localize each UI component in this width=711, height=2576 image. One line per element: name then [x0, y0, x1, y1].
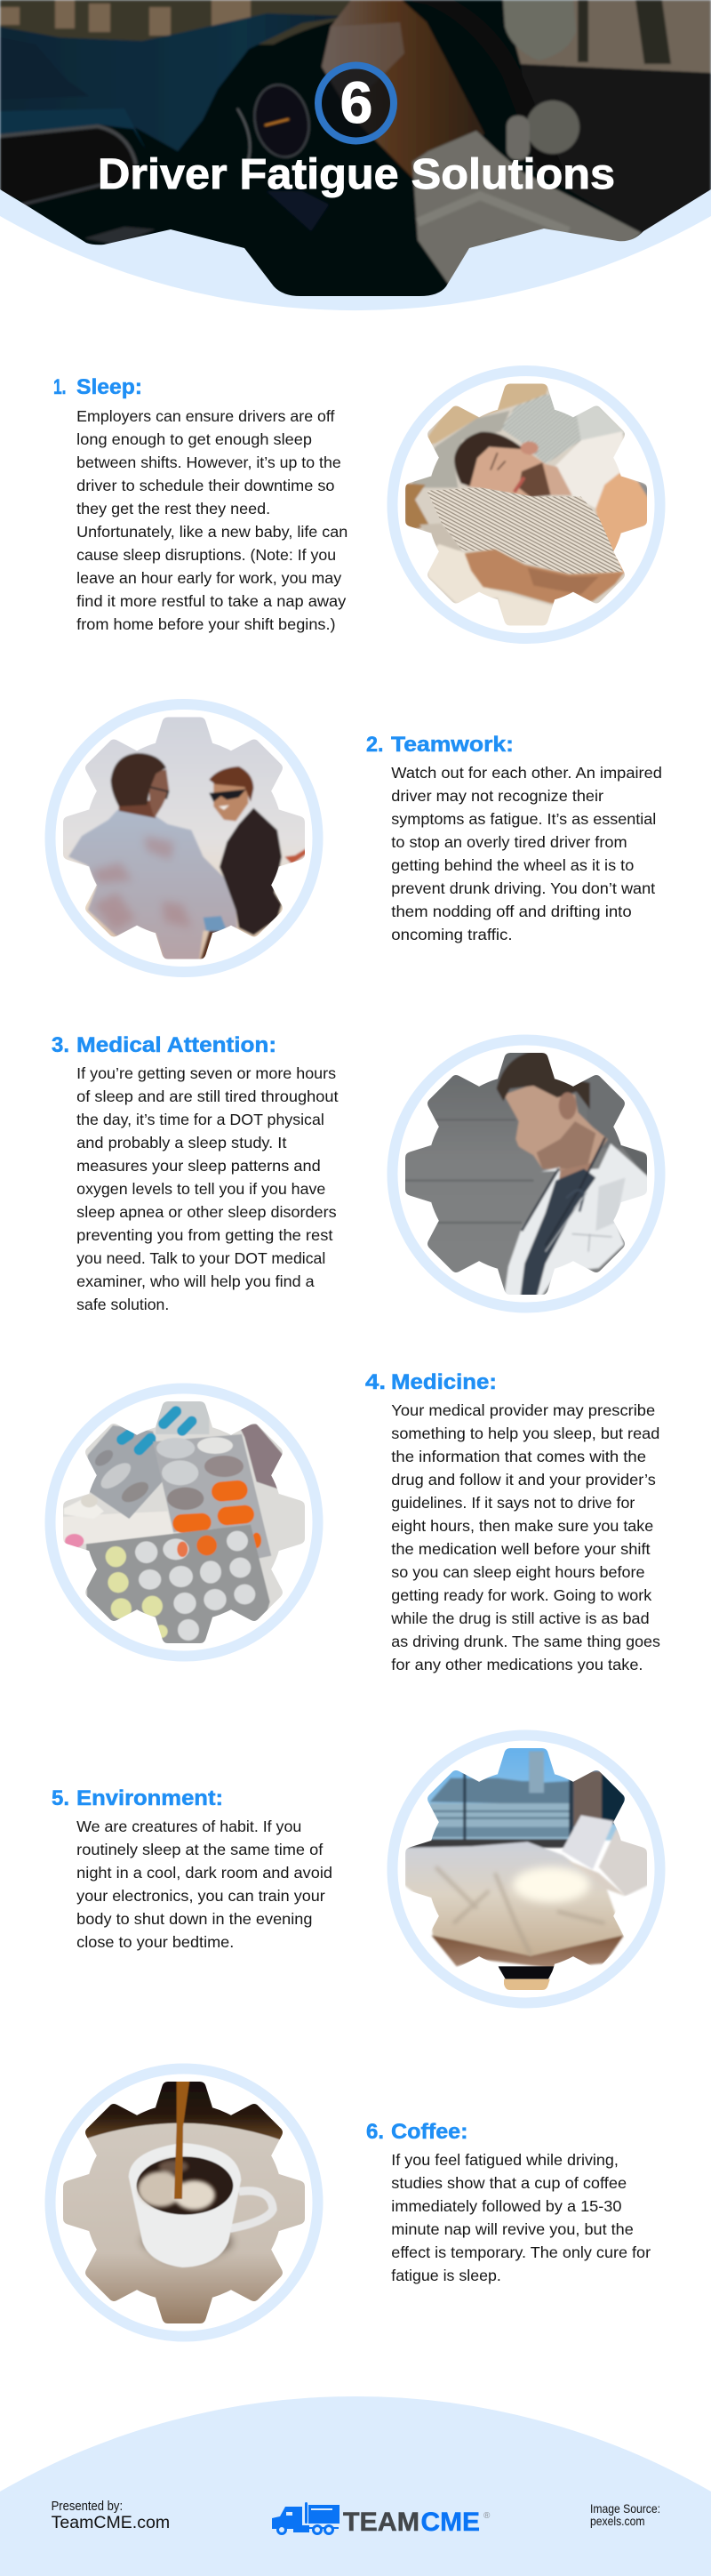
- image: two men talking: [50, 704, 318, 972]
- footer logo: TeamCME truck: TEAM: [343, 2508, 419, 2537]
- body text: medical attention: measures your sleep patterns and: [76, 1157, 321, 1175]
- body text: medicine: the information that comes with the: [391, 1448, 646, 1465]
- body text: teamwork: getting behind the wheel as it is to: [391, 856, 634, 874]
- body text: environment: routinely sleep at the same time of: [76, 1841, 323, 1858]
- body text: medical attention: If you’re getting seven or more hours: [76, 1064, 336, 1082]
- body text: medicine: guidelines. If it says not to drive for: [391, 1494, 635, 1512]
- body text: teamwork: them nodding off and drifting into: [391, 903, 632, 920]
- gauge: [252, 82, 311, 160]
- footer logo: TeamCME truck: ®: [483, 2511, 491, 2521]
- body text: coffee: effect is temporary. The only cure for: [391, 2243, 651, 2261]
- panel: 4. Medicine text: [365, 1370, 660, 1673]
- body text: teamwork: oncoming traffic.: [391, 926, 512, 943]
- panel: 1. Sleep text: [53, 375, 348, 633]
- body text: sleep: from home before your shift begins.): [76, 615, 336, 633]
- heading: 1. Sleep: 1.: [53, 375, 66, 399]
- body text: environment: body to shut down in the evening: [76, 1910, 312, 1928]
- body text: teamwork: prevent drunk driving. You don’t want: [391, 879, 655, 897]
- header number badge: 6: [340, 69, 372, 135]
- body text: medical attention: you need. Talk to your DOT medical: [76, 1249, 325, 1267]
- body text: sleep: cause sleep disruptions. (Note: If you: [76, 546, 336, 564]
- panel: 2. Teamwork text: [366, 733, 662, 943]
- footer: image source: [590, 2501, 660, 2528]
- body text: medicine: for any other medications you take.: [391, 1656, 643, 1673]
- body text: coffee: [391, 2151, 651, 2284]
- heading: 3. Medical Attention: 3.: [52, 1033, 69, 1057]
- body text: medical attention: the day, it’s time for a DOT physical: [76, 1111, 324, 1128]
- soft duvet folds: [435, 1867, 604, 1954]
- body text: sleep: they get the rest they need.: [76, 500, 270, 518]
- body text: coffee: If you feel fatigued while driving,: [391, 2151, 619, 2169]
- body text: medicine: getting ready for work. Going to work: [391, 1586, 651, 1604]
- body text: sleep: leave an hour early for work, you may: [76, 569, 341, 587]
- header number badge: [318, 66, 394, 140]
- heading: 2. Teamwork: Teamwork:: [391, 733, 514, 757]
- heading: 4. Medicine: Medicine:: [391, 1370, 497, 1394]
- body text: coffee: studies show that a cup of coffee: [391, 2174, 627, 2192]
- heading: 5. Environment: Environment:: [76, 1786, 223, 1810]
- body text: coffee: fatigue is sleep.: [391, 2267, 501, 2284]
- body text: medical attention: [76, 1064, 339, 1313]
- body text: sleep: find it more restful to take a nap away: [76, 592, 347, 610]
- footer logo: TeamCME truck: CME: [421, 2508, 480, 2537]
- panel: 6. Coffee text: [366, 2120, 651, 2284]
- body text: teamwork: to stop an overly tired driver from: [391, 833, 627, 851]
- body text: medical attention: of sleep and are still tired throughout: [76, 1087, 339, 1105]
- body text: teamwork: driver may not recognize their: [391, 787, 603, 805]
- body text: medical attention: oxygen levels to tell you if you have: [76, 1180, 325, 1198]
- body text: medical attention: examiner, who will help you find a: [76, 1272, 315, 1290]
- body text: coffee: immediately followed by a 15-30: [391, 2197, 622, 2215]
- footer: presented by: Presented by:: [52, 2500, 123, 2514]
- body text: medicine: so you can sleep eight hours before: [391, 1563, 645, 1581]
- body text: medical attention: safe solution.: [76, 1296, 169, 1313]
- panel: 3. Medical Attention text: [52, 1033, 339, 1313]
- body text: sleep: long enough to get enough sleep: [76, 430, 312, 448]
- steering wheel and door: [521, 64, 711, 233]
- heading: 6. Coffee: 6.: [366, 2120, 384, 2144]
- image: doctor with stethoscope: [393, 1040, 659, 1307]
- footer logo: TeamCME truck: [272, 2502, 491, 2537]
- image: man sleeping on striped pillow: [393, 371, 659, 638]
- body text: sleep: driver to schedule their downtime so: [76, 477, 334, 494]
- body text: environment: close to your bedtime.: [76, 1933, 234, 1951]
- body text: sleep: [76, 407, 348, 633]
- image: coffee pouring into white cup: [50, 2068, 318, 2337]
- footer background curve: [0, 2396, 711, 2576]
- body text: medical attention: preventing you from getting the rest: [76, 1226, 333, 1244]
- body text: medicine: as driving drunk. The same thing goes: [391, 1633, 660, 1650]
- body text: coffee: minute nap will revive you, but the: [391, 2220, 634, 2238]
- icon: truck: [272, 2502, 340, 2535]
- body text: medical attention: and probably a sleep study. It: [76, 1134, 287, 1152]
- heading: 4. Medicine: 4.: [365, 1370, 386, 1394]
- title: Driver Fatigue Solutions: [98, 151, 615, 198]
- heading: 6. Coffee: Coffee:: [391, 2120, 467, 2144]
- body text: medicine: the medication well before your shift: [391, 1540, 651, 1558]
- heading: 1. Sleep: Sleep:: [76, 375, 142, 399]
- body text: medicine: Your medical provider may prescribe: [391, 1401, 655, 1419]
- body text: environment: [76, 1818, 332, 1951]
- body text: sleep: Unfortunately, like a new baby, life can: [76, 523, 348, 541]
- body text: environment: your electronics, you can train your: [76, 1887, 325, 1905]
- body text: medicine: eight hours, then make sure you take: [391, 1517, 653, 1535]
- panel: 5. Environment text: [52, 1786, 332, 1951]
- footer: image source: Image Source:: [590, 2501, 660, 2516]
- footer: presented by: [52, 2500, 170, 2532]
- image: medicine blister packs: [50, 1389, 318, 1656]
- body text: teamwork: [391, 764, 662, 943]
- header photo: car dashboard and driver arm: [0, 0, 711, 302]
- body text: teamwork: symptoms as fatigue. It’s as essential: [391, 810, 656, 828]
- body text: medical attention: sleep apnea or other sleep disorders: [76, 1203, 337, 1221]
- body text: sleep: Employers can ensure drivers are off: [76, 407, 335, 425]
- heading: 3. Medical Attention: Medical Attention:: [76, 1033, 276, 1057]
- body text: environment: We are creatures of habit. If you: [76, 1818, 301, 1835]
- body text: environment: night in a cool, dark room and avoid: [76, 1864, 332, 1882]
- body text: medicine: [390, 1401, 660, 1673]
- body text: sleep: between shifts. However, it’s up to the: [76, 453, 341, 471]
- footer: presented by: TeamCME.com: [52, 2514, 170, 2532]
- image: bed by city window: [393, 1736, 659, 2002]
- body text: medicine: something to help you sleep, but read: [391, 1424, 659, 1442]
- body text: medicine: while the drug is still active is as bad: [390, 1609, 650, 1627]
- heading: 2. Teamwork: 2.: [366, 733, 384, 757]
- body text: teamwork: Watch out for each other. An impaired: [391, 764, 662, 782]
- heading: 5. Environment: 5.: [52, 1786, 69, 1810]
- body text: medicine: drug and follow it and your provider’s: [391, 1471, 656, 1489]
- footer: image source: pexels.com: [590, 2514, 645, 2528]
- header background curve: [0, 0, 711, 310]
